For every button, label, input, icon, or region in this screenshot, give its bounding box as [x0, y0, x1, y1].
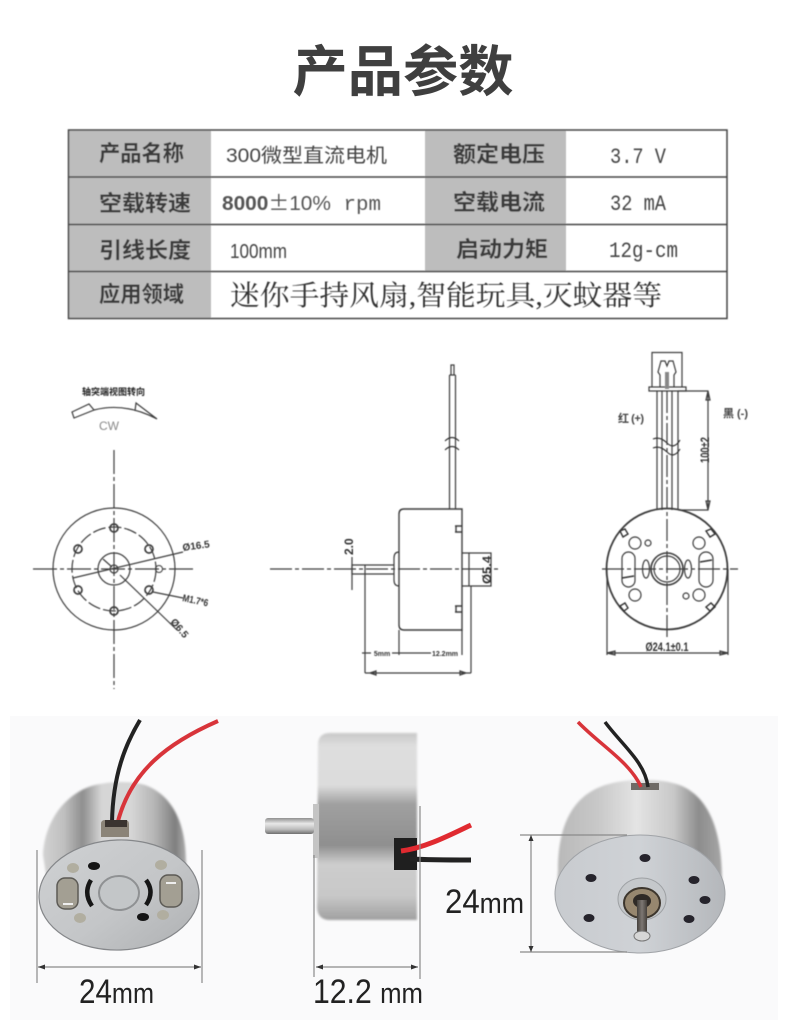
label: red positive: 红 (+)	[618, 411, 644, 425]
motor plate	[606, 508, 728, 630]
dimension: overall length	[365, 565, 471, 675]
dimension lines	[37, 850, 202, 983]
motor body	[399, 509, 462, 630]
dimension lines	[520, 835, 627, 952]
row: no-load speed	[99, 187, 667, 217]
red wire	[401, 825, 471, 851]
photo: motor rear view	[37, 720, 218, 1011]
wire slot	[105, 820, 127, 827]
row: lead length: 启动力矩	[456, 237, 548, 262]
panel: photo background	[10, 716, 778, 1020]
motor diameter value: Ø24.1±0.1	[646, 642, 689, 654]
lead wires	[657, 391, 678, 510]
dimension: motor diameter	[607, 569, 728, 655]
motor body	[317, 733, 417, 920]
row: product name	[99, 141, 667, 170]
end plate	[555, 835, 725, 953]
terminal highlights	[63, 883, 176, 904]
slots	[87, 880, 150, 906]
front rim	[313, 804, 319, 858]
row: product name: 3.7 V	[610, 145, 667, 170]
red wire	[117, 721, 218, 825]
row: lead length: 引线长度	[99, 238, 191, 263]
row: lead length: 100mm	[230, 241, 287, 263]
front and rear bosses	[394, 552, 469, 586]
rivets	[67, 860, 169, 923]
connector center	[665, 372, 669, 389]
dimension: boss diameter: Ø6.5	[168, 617, 190, 641]
row: lead length: 12g-cm	[609, 239, 678, 264]
row: no-load speed: 空载转速	[99, 191, 191, 216]
center line	[270, 568, 498, 570]
photo: motor side view	[265, 733, 524, 1011]
row: product name: 额定电压	[453, 142, 545, 167]
center lines	[602, 391, 738, 640]
mounting holes	[74, 524, 162, 615]
wire tab	[631, 783, 659, 790]
dimension ticks	[362, 652, 431, 654]
label: black negative: 黑 (-)	[723, 407, 748, 420]
row: product name: 300微型直流电机	[226, 145, 388, 167]
center boss	[618, 878, 666, 920]
dimension lines	[314, 806, 420, 979]
plate details	[620, 529, 715, 611]
center boss	[99, 876, 139, 910]
table grid	[68, 130, 727, 318]
icon: rotation arrow	[72, 403, 157, 419]
wire tab	[101, 820, 129, 837]
dimension: shaft diameter	[351, 557, 353, 590]
row: applications: 迷你手持风扇,智能玩具,灭蚊器等	[230, 280, 662, 312]
boss diameter value: Ø5.4	[480, 556, 494, 584]
bearing	[624, 888, 660, 918]
end plate	[37, 837, 201, 953]
dimension value: 24mm	[79, 973, 154, 1011]
motor body	[556, 780, 724, 900]
dimension: screw thread: M1.7*6	[181, 593, 209, 609]
shaft tip	[634, 931, 650, 941]
drawing: shaft end view	[33, 386, 211, 689]
row: no-load speed: 8000±10% rpm	[222, 187, 381, 217]
black wire	[605, 722, 648, 787]
title: 产品参数	[292, 41, 514, 103]
shaft diameter value: 2.0	[342, 538, 356, 555]
shaft	[265, 818, 314, 834]
mounting holes	[584, 854, 710, 923]
dimension leaders	[73, 552, 183, 630]
dimension: shaft length: 5mm	[374, 651, 390, 658]
photo: motor front view	[520, 722, 725, 953]
lead wire	[450, 365, 456, 509]
black wire	[410, 859, 471, 860]
row: product name: 产品名称	[99, 141, 184, 166]
dimension arrows	[38, 964, 201, 970]
dimension: body thickness: 12.2mm	[432, 651, 458, 658]
shaft	[637, 900, 647, 932]
black holes	[88, 862, 149, 921]
dimension: hole circle diameter: Ø16.5	[182, 539, 211, 554]
rotation direction CW: CW	[99, 419, 120, 433]
dimension: boss diameter	[469, 553, 491, 586]
drawing: side view	[270, 365, 498, 675]
dimension value: thickness: 12.2 mm	[313, 973, 423, 1011]
row: applications: 应用领域	[99, 282, 184, 307]
table label cells	[69, 130, 566, 318]
row: lead length	[99, 237, 678, 264]
red wire	[578, 722, 641, 787]
mounting circles	[53, 508, 175, 630]
terminals	[57, 875, 182, 909]
row: no-load speed: 空载电流	[453, 190, 545, 215]
connector	[649, 352, 686, 391]
rotation direction label: 轴突端视图转向	[82, 386, 145, 397]
wire slot	[394, 838, 417, 870]
motor body	[43, 782, 190, 900]
row: applications	[99, 280, 662, 312]
wire break	[445, 438, 459, 450]
dimension arrows	[528, 835, 534, 952]
center lines	[33, 450, 195, 689]
wire break	[653, 438, 680, 455]
panel: parameter table	[68, 130, 727, 318]
dimension value: height: 24mm	[445, 883, 524, 921]
drawing: rear view	[602, 352, 748, 655]
row: no-load speed: 32 mA	[610, 192, 667, 217]
shaft	[352, 565, 394, 574]
dimension arrows	[316, 964, 418, 970]
black wire	[112, 720, 140, 822]
bearing bore	[633, 894, 651, 908]
dimension: lead length	[678, 391, 710, 510]
lead length value: 100±2	[698, 437, 712, 463]
